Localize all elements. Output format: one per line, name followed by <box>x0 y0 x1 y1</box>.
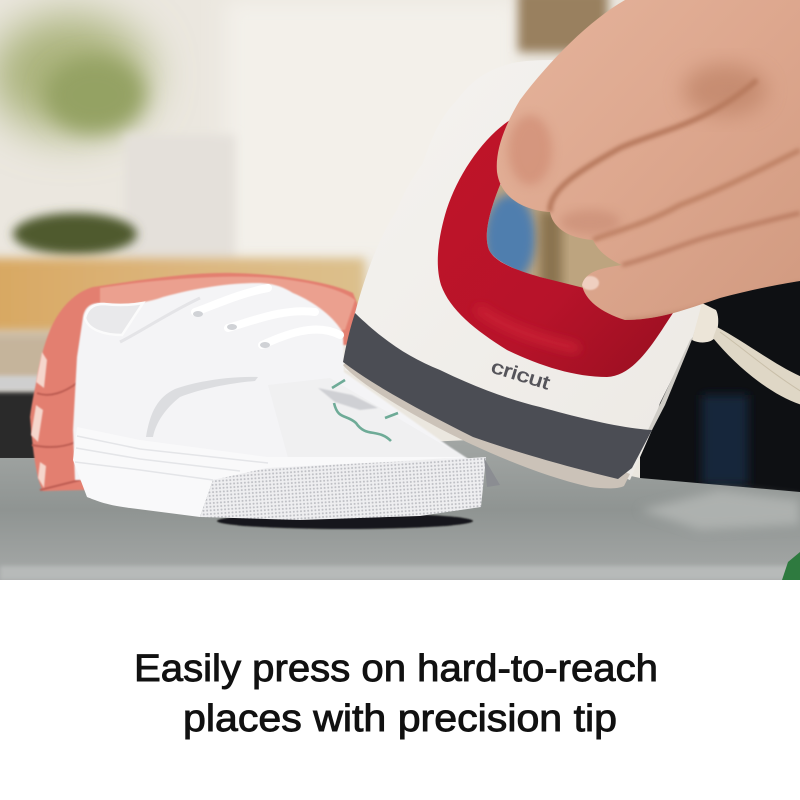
handle highlight <box>480 310 575 348</box>
board fabric highlights <box>0 490 800 580</box>
sole plate <box>343 360 630 488</box>
view through the handle gap <box>486 185 622 288</box>
textured toe cap <box>200 457 486 520</box>
ironing board <box>0 440 800 580</box>
collar edge <box>120 298 200 342</box>
body shading near the right edge <box>648 337 693 430</box>
mini heat press <box>343 60 800 488</box>
upper hand highlight <box>100 277 355 330</box>
photo: pressing a shoe with a mini heat press <box>0 0 800 580</box>
cord connector <box>692 303 718 342</box>
cricut logo: cricut <box>489 357 553 395</box>
green transfer design <box>332 380 398 441</box>
caption line 2: places with precision tip <box>183 698 617 740</box>
caption <box>134 648 658 740</box>
translucent transfer sheet <box>268 378 462 478</box>
dark band <box>343 313 652 479</box>
laces <box>195 288 340 345</box>
supporting hand behind the shoe <box>30 273 360 491</box>
hand holding the press <box>497 0 800 330</box>
finger shading <box>508 64 800 330</box>
white press body <box>345 60 703 480</box>
red handle <box>438 120 673 377</box>
dark background at right <box>640 270 800 495</box>
lace eyelets <box>193 311 270 348</box>
shoe collar <box>85 303 143 335</box>
fingernail highlights <box>31 352 47 488</box>
caption line 1: Easily press on hard-to-reach <box>134 648 658 690</box>
blurred room background <box>0 0 640 478</box>
rubber midsole ribs <box>73 446 454 517</box>
power cord <box>713 327 800 405</box>
contact shadow under the shoe <box>217 513 473 529</box>
side stitching seam <box>146 377 258 437</box>
white canvas shoe <box>73 283 500 520</box>
transfer shadow <box>318 388 378 410</box>
finger creases <box>32 383 80 490</box>
transfer sheet tail at toe <box>484 458 500 487</box>
shoe upper <box>73 283 470 480</box>
